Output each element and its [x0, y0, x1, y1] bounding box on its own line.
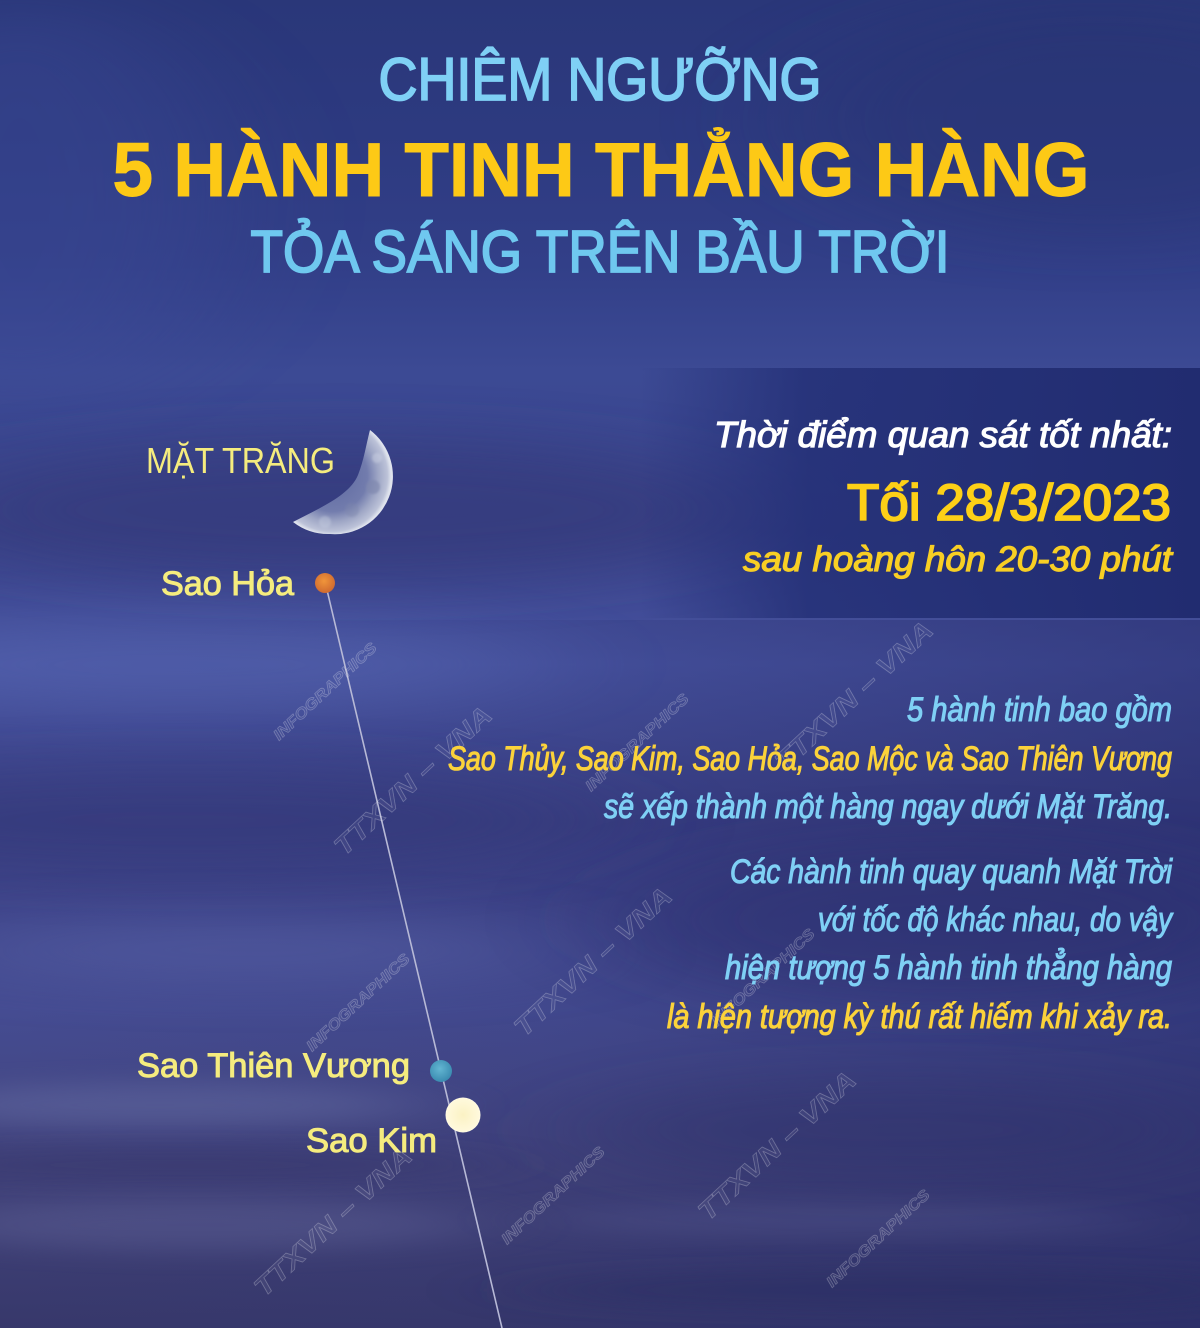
watermarks: INFOGRAPHICS: [708, 925, 818, 1030]
watermarks: INFOGRAPHICS: [582, 690, 692, 795]
watermarks: INFOGRAPHICS: [498, 1143, 608, 1248]
title line 2: 5 HÀNH TINH THẲNG HÀNG: [112, 127, 1090, 213]
watermarks: [248, 615, 939, 1302]
viewing window: sau hoàng hôn 20-30 phút: [743, 540, 1173, 579]
watermarks: TTXVN – VNA: [248, 1141, 418, 1302]
label: Uranus: Sao Thiên Vương: [137, 1047, 410, 1085]
title line 3: TỎA SÁNG TRÊN BẦU TRỜI: [250, 218, 950, 285]
label: Mars: Sao Hỏa: [161, 565, 294, 603]
watermarks: INFOGRAPHICS: [303, 950, 413, 1055]
watermarks: TTXVN – VNA: [769, 615, 939, 776]
watermarks: TTXVN – VNA: [328, 700, 498, 861]
panel heading: Thời điểm quan sát tốt nhất:: [714, 414, 1172, 455]
watermarks: TTXVN – VNA: [692, 1065, 862, 1226]
icon: Uranus: [430, 1060, 452, 1082]
label: moon: MẶT TRĂNG: [146, 440, 335, 481]
icon: Mars: [315, 573, 335, 593]
title line 1: CHIÊM NGƯỠNG: [378, 46, 822, 113]
text block: rarity explanation: [667, 853, 1174, 1036]
watermarks: INFOGRAPHICS: [823, 1186, 933, 1291]
alignment line: [327, 590, 502, 1328]
label: Venus: Sao Kim: [306, 1122, 437, 1160]
watermarks: TTXVN – VNA: [508, 881, 678, 1042]
viewing date: Tối 28/3/2023: [847, 474, 1171, 531]
panel: best viewing time: [640, 368, 1200, 618]
text block: five planets: [448, 691, 1172, 826]
watermarks: INFOGRAPHICS: [270, 639, 380, 744]
icon: crescent moon: [293, 430, 393, 534]
icon: Venus: [446, 1098, 480, 1132]
title: [112, 46, 1090, 285]
